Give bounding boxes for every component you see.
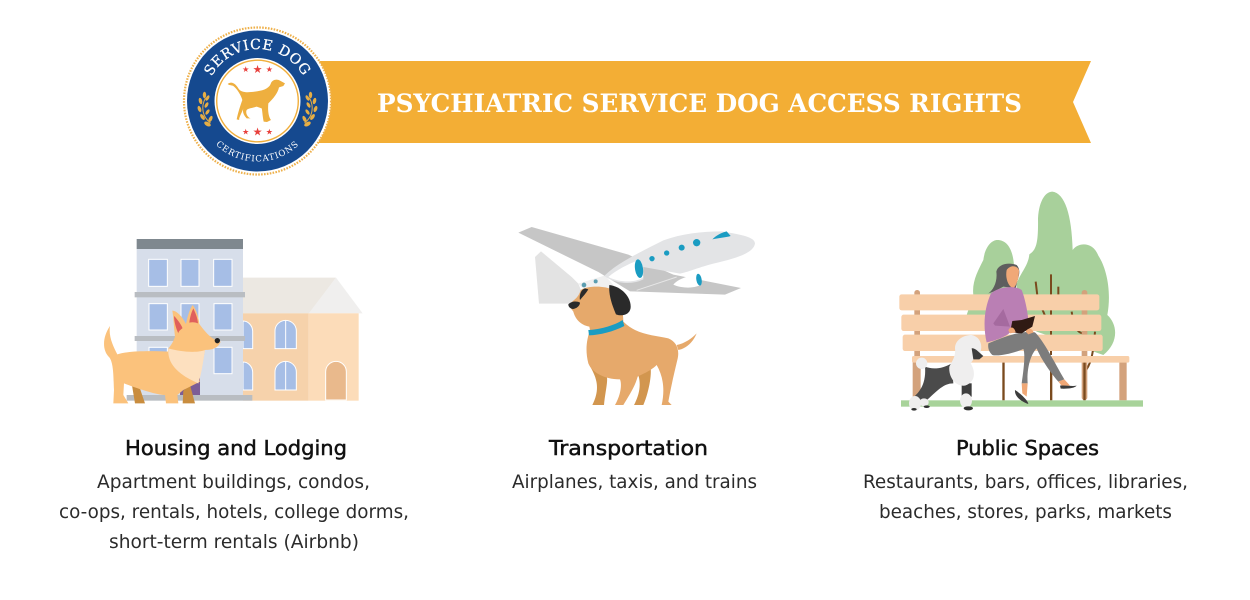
text: transportation details: Airplanes, taxis, and trains	[512, 472, 757, 493]
text: housing details: short-term rentals (Airbnb)	[109, 532, 359, 553]
badge stars	[242, 63, 273, 138]
badge top text: SERVICE DOG	[204, 38, 310, 76]
heading: public spaces: Public Spaces	[956, 436, 1099, 460]
heading: transportation: Transportation	[548, 436, 708, 460]
woman	[985, 264, 1077, 404]
text: public spaces details: Restaurants, bars, offices, libraries,	[863, 472, 1188, 493]
column: housing and lodging	[59, 436, 409, 553]
badge laurels	[197, 92, 318, 128]
house	[243, 278, 363, 401]
illustration: woman reading on bench with poodle	[899, 192, 1143, 411]
text: public spaces details: beaches, stores, parks, markets	[879, 502, 1172, 523]
text: housing details: co-ops, rentals, hotels, college dorms,	[59, 502, 409, 523]
dog	[568, 285, 697, 405]
badge stars: ★	[253, 126, 263, 138]
branches	[1036, 274, 1095, 373]
heading: housing: Housing and Lodging	[125, 436, 347, 460]
text: housing details: Apartment buildings, condos,	[97, 472, 370, 493]
apartment building	[127, 239, 252, 401]
illustration: airplane and dog	[518, 227, 755, 405]
ground	[901, 400, 1143, 407]
badge stars: ★	[253, 63, 263, 76]
badge logo	[182, 26, 332, 176]
bench	[899, 290, 1129, 400]
airplane	[518, 227, 755, 304]
badge bottom text: CERTIFICATIONS	[217, 141, 298, 162]
badge dog silhouette	[228, 80, 285, 122]
column: public spaces	[863, 436, 1188, 523]
badge stars: ★	[242, 65, 249, 74]
column: transportation	[512, 436, 757, 493]
text: public spaces details	[863, 472, 1188, 523]
title text: PSYCHIATRIC SERVICE DOG ACCESS RIGHTS	[377, 89, 1022, 118]
poodle	[909, 335, 983, 411]
illustration: buildings and corgi	[104, 239, 363, 403]
corgi	[104, 305, 221, 403]
trees	[967, 192, 1115, 355]
text: housing details	[59, 472, 409, 553]
badge stars: ★	[266, 65, 273, 74]
badge stars: ★	[266, 128, 273, 136]
badge stars: ★	[242, 128, 249, 136]
title banner	[318, 61, 1091, 143]
